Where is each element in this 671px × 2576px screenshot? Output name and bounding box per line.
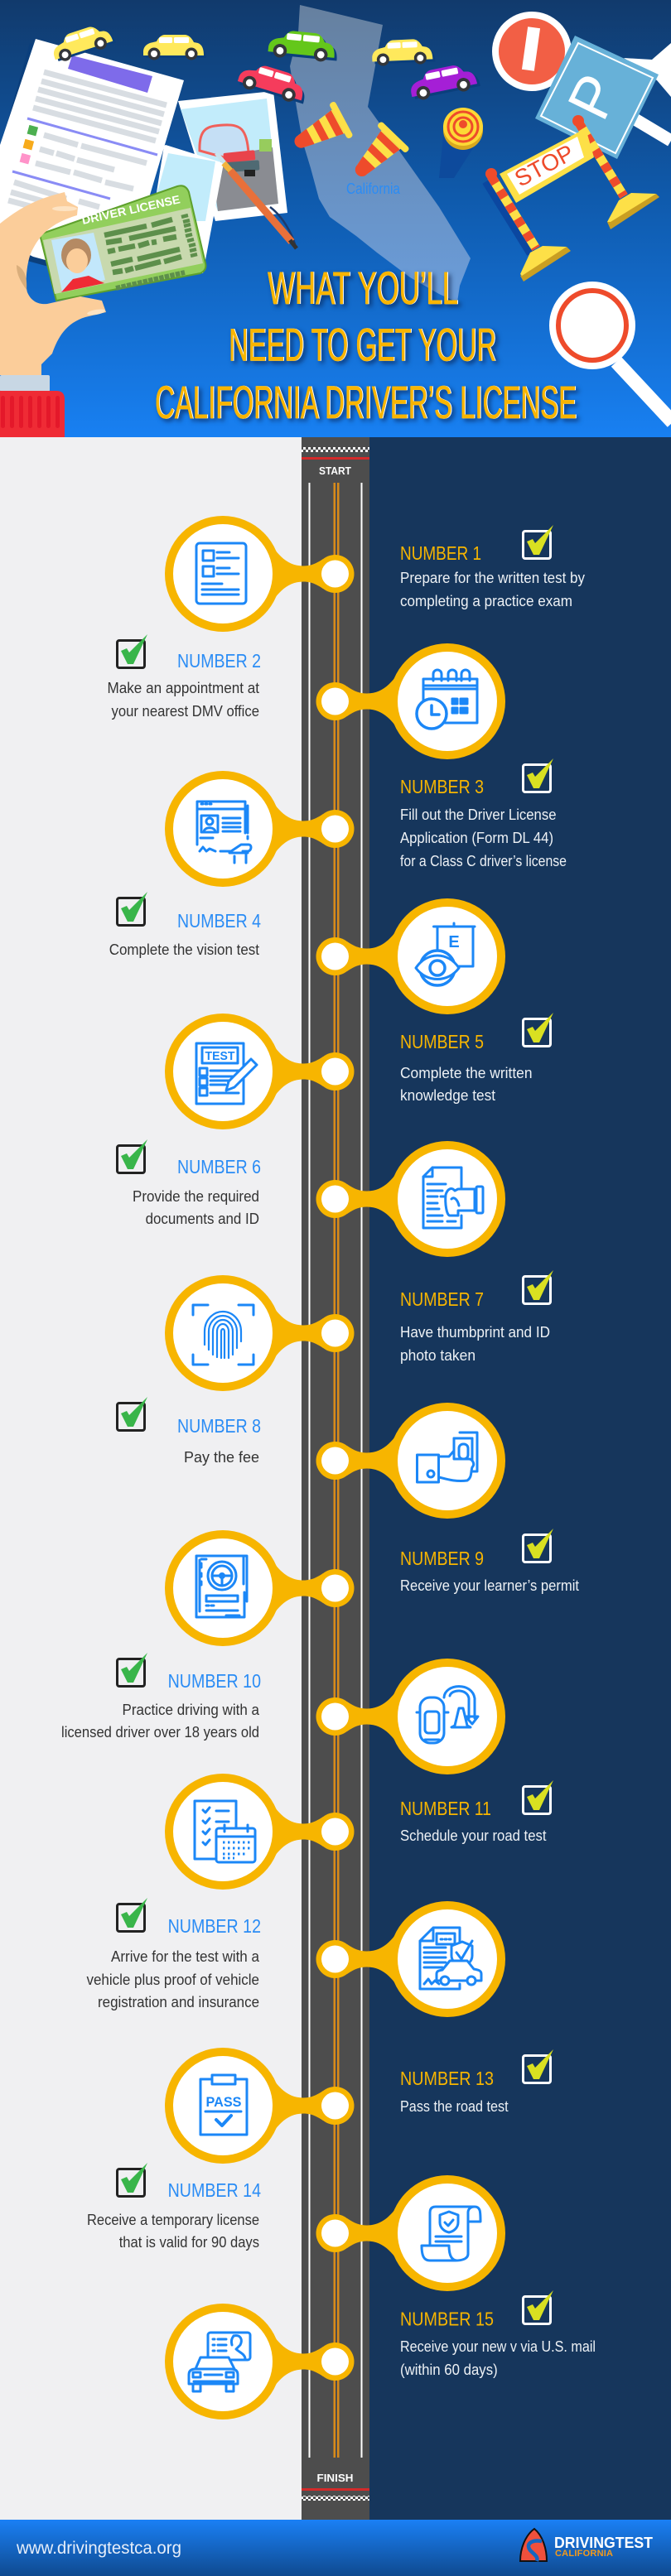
parking sign (535, 36, 659, 159)
photo of truck (178, 91, 287, 221)
step 10 text: Practice driving with a (123, 1702, 260, 1718)
step 4 text: NUMBER 4 (177, 910, 261, 932)
icon: fingerprint (193, 1305, 253, 1365)
step 6 text (118, 1139, 261, 1227)
step 12 node (316, 1901, 505, 2017)
step 12 text (86, 1898, 261, 2010)
step 10 text: NUMBER 10 (168, 1670, 261, 1692)
step 11 node (165, 1774, 355, 1890)
shirt cuff and sleeve (0, 375, 65, 437)
logo: DRIVINGTEST (554, 2535, 653, 2551)
parking sign: P (556, 65, 632, 129)
step 1 node (165, 516, 355, 632)
step 9 text: NUMBER 9 (400, 1548, 484, 1569)
stop barrier (485, 115, 659, 282)
step 5 node (165, 1014, 355, 1129)
step 6 text: documents and ID (146, 1211, 259, 1227)
step 3 text (400, 758, 567, 869)
step 8 text: Pay the fee (184, 1449, 259, 1466)
step 3 node (165, 771, 355, 887)
step 1 text: Prepare for the written test by (400, 570, 585, 586)
icon: written test (196, 1043, 257, 1104)
icon: certificate scroll (422, 2207, 480, 2261)
step 14 text (87, 2163, 261, 2251)
step 10 text (61, 1653, 261, 1741)
icon: checklist document (196, 543, 246, 604)
step 8 text: NUMBER 8 (177, 1415, 261, 1437)
step 2 node (316, 643, 505, 759)
icon: checklist and calendar (195, 1801, 255, 1862)
step 3 text: Fill out the Driver License (400, 807, 557, 823)
logo (520, 2529, 653, 2561)
icon: PASS clipboard (200, 2075, 247, 2135)
magnifying glass (549, 282, 671, 422)
icon: PASS clipboard: PASS (205, 2094, 242, 2110)
icon: eye chart (416, 923, 475, 985)
step 15 node (165, 2304, 355, 2420)
step 1 text: completing a practice exam (400, 593, 572, 609)
driver license card (40, 185, 205, 301)
logo: CALIFORNIA (555, 2549, 613, 2559)
step 5 text: NUMBER 5 (400, 1031, 484, 1052)
step 8 text (118, 1397, 261, 1466)
step 2 text: NUMBER 2 (177, 650, 261, 672)
step 13 text: NUMBER 13 (400, 2068, 494, 2089)
step 4 node (316, 898, 505, 1014)
step 14 text: Receive a temporary license (87, 2212, 259, 2228)
step 14 text: NUMBER 14 (168, 2179, 261, 2201)
application form paper (0, 39, 184, 286)
icon: registration, insurance and car (420, 1928, 481, 1989)
step 1 text: NUMBER 1 (400, 542, 481, 564)
title (155, 262, 577, 428)
step 7 node (165, 1275, 355, 1391)
step 11 text: NUMBER 11 (400, 1798, 491, 1819)
no-entry sign (492, 12, 671, 141)
icon: application form with hand (197, 802, 251, 863)
step 8 node (316, 1403, 505, 1519)
step 6 node (316, 1141, 505, 1257)
step 11 text: Schedule your road test (400, 1827, 547, 1844)
step 6 text: Provide the required (133, 1188, 259, 1205)
toy cars (49, 21, 481, 106)
target disc (439, 108, 483, 178)
step 2 text (108, 634, 261, 720)
map: California: California (346, 181, 401, 197)
footer website: www.drivingtestca.org (16, 2539, 181, 2558)
step 4 text (109, 892, 261, 958)
step 15 text: NUMBER 15 (400, 2309, 494, 2330)
step 3 text: for a Class C driver’s license (400, 853, 567, 869)
step 7 text: NUMBER 7 (400, 1288, 484, 1310)
step 14 node (316, 2175, 505, 2291)
header banner (0, 0, 671, 437)
step 15 text: (within 60 days) (400, 2362, 498, 2378)
step 1 text (400, 525, 585, 609)
step 5 text: Complete the written (400, 1065, 532, 1081)
map: California (290, 5, 471, 302)
driver license card: DRIVER LICENSE (80, 192, 181, 227)
traffic cones (286, 101, 410, 189)
step 6 text: NUMBER 6 (177, 1156, 261, 1177)
step 15 text (400, 2290, 596, 2378)
icon: eye chart: E (448, 933, 460, 951)
step 12 text: NUMBER 12 (168, 1915, 261, 1937)
step 14 text: that is valid for 90 days (119, 2234, 259, 2251)
hand holding card (0, 192, 106, 375)
step 13 text: Pass the road test (400, 2098, 509, 2115)
step 7 text (400, 1270, 553, 1364)
road: START (319, 465, 351, 477)
step 13 text (400, 2049, 553, 2115)
footer (0, 2520, 671, 2576)
title: WHAT YOU’LL (268, 262, 458, 314)
pen (216, 153, 297, 248)
step 9 text: Receive your learner’s permit (400, 1577, 579, 1594)
stop barrier: STOP (510, 139, 578, 192)
step 9 text (400, 1529, 579, 1594)
step 13 node (165, 2048, 355, 2164)
panel: left background (0, 437, 302, 2520)
step 7 text: photo taken (400, 1347, 475, 1364)
second photo (145, 145, 224, 273)
step 10 node (316, 1659, 505, 1774)
panel: right background (369, 437, 671, 2520)
icon: permit booklet (196, 1556, 247, 1617)
step 4 text: Complete the vision test (109, 941, 259, 958)
step 5 text (400, 1013, 553, 1104)
icon: car and new license (189, 2333, 250, 2391)
step 3 text: Application (Form DL 44) (400, 830, 553, 846)
step 2 text: Make an appointment at (108, 680, 259, 696)
icon: written test: TEST (205, 1050, 235, 1063)
icon: document held by hand (423, 1168, 483, 1228)
step 10 text: licensed driver over 18 years old (61, 1724, 259, 1741)
icon: calendar and clock (417, 670, 477, 729)
icon: car and traffic cone (417, 1687, 478, 1743)
step 7 text: Have thumbprint and ID (400, 1324, 550, 1341)
icon: hand paying cash (418, 1432, 477, 1482)
step 11 text (400, 1780, 553, 1844)
road: FINISH (316, 2472, 353, 2484)
step 9 node (165, 1530, 355, 1646)
step 12 text: vehicle plus proof of vehicle (86, 1972, 259, 1988)
step 12 text: Arrive for the test with a (111, 1948, 260, 1965)
step 2 text: your nearest DMV office (111, 703, 259, 720)
step 12 text: registration and insurance (98, 1994, 259, 2010)
step 15 text: Receive your new v via U.S. mail (400, 2338, 596, 2355)
step 5 text: knowledge test (400, 1087, 495, 1104)
step 3 text: NUMBER 3 (400, 776, 484, 797)
road (302, 437, 369, 2520)
